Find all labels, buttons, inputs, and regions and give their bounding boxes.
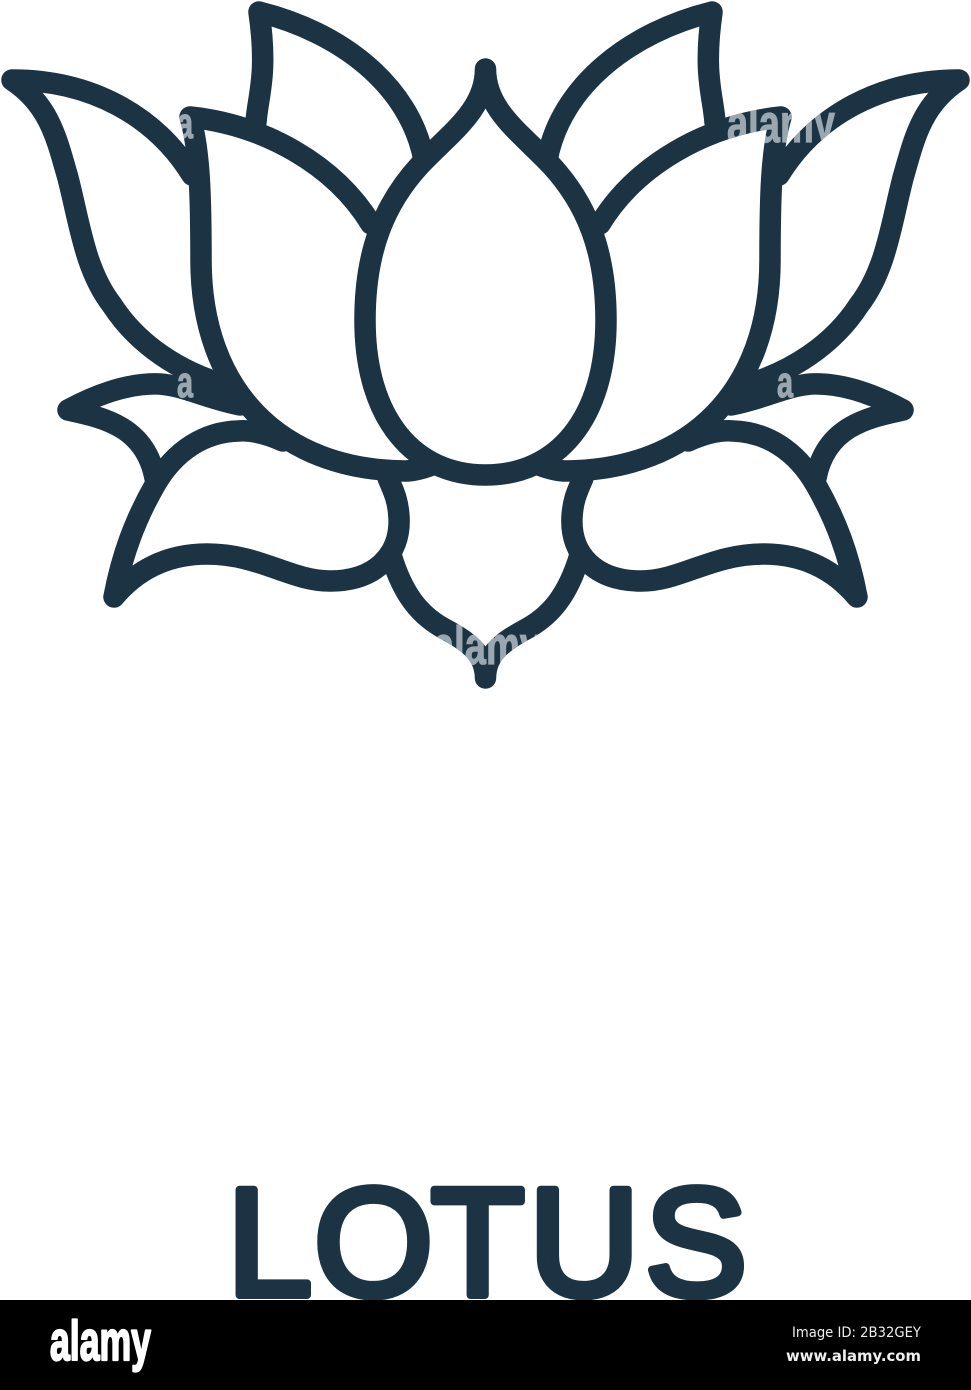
right outer petal: [746, 80, 959, 385]
icon: lotus flower: [12, 12, 959, 678]
left back petal: [256, 12, 424, 160]
watermark overlays: alamy: [727, 94, 835, 154]
right inner petal: [539, 117, 781, 471]
left outer petal: [12, 80, 225, 385]
watermark overlays: [177, 94, 835, 676]
title: LOTUS: LOTUS: [227, 1157, 747, 1328]
bottom petal: [391, 555, 580, 678]
website: www.alamy.com: [786, 1347, 921, 1365]
watermark overlays: a: [177, 99, 193, 148]
right lower leaf: [572, 431, 857, 597]
image id: Image ID: 2B32GEY: [792, 1325, 921, 1341]
left small side leaf: [68, 384, 240, 478]
center petal: [365, 69, 606, 475]
left lower leaf: [114, 431, 399, 597]
watermark overlays: alamy: [433, 616, 541, 676]
footer bar: [0, 1300, 971, 1390]
watermark overlays: a: [177, 358, 193, 407]
watermark logo text: alamy: [50, 1309, 151, 1372]
right small side leaf: [731, 384, 903, 478]
right back petal: [547, 12, 715, 160]
left inner petal: [190, 117, 432, 471]
watermark overlays: a: [777, 358, 793, 407]
